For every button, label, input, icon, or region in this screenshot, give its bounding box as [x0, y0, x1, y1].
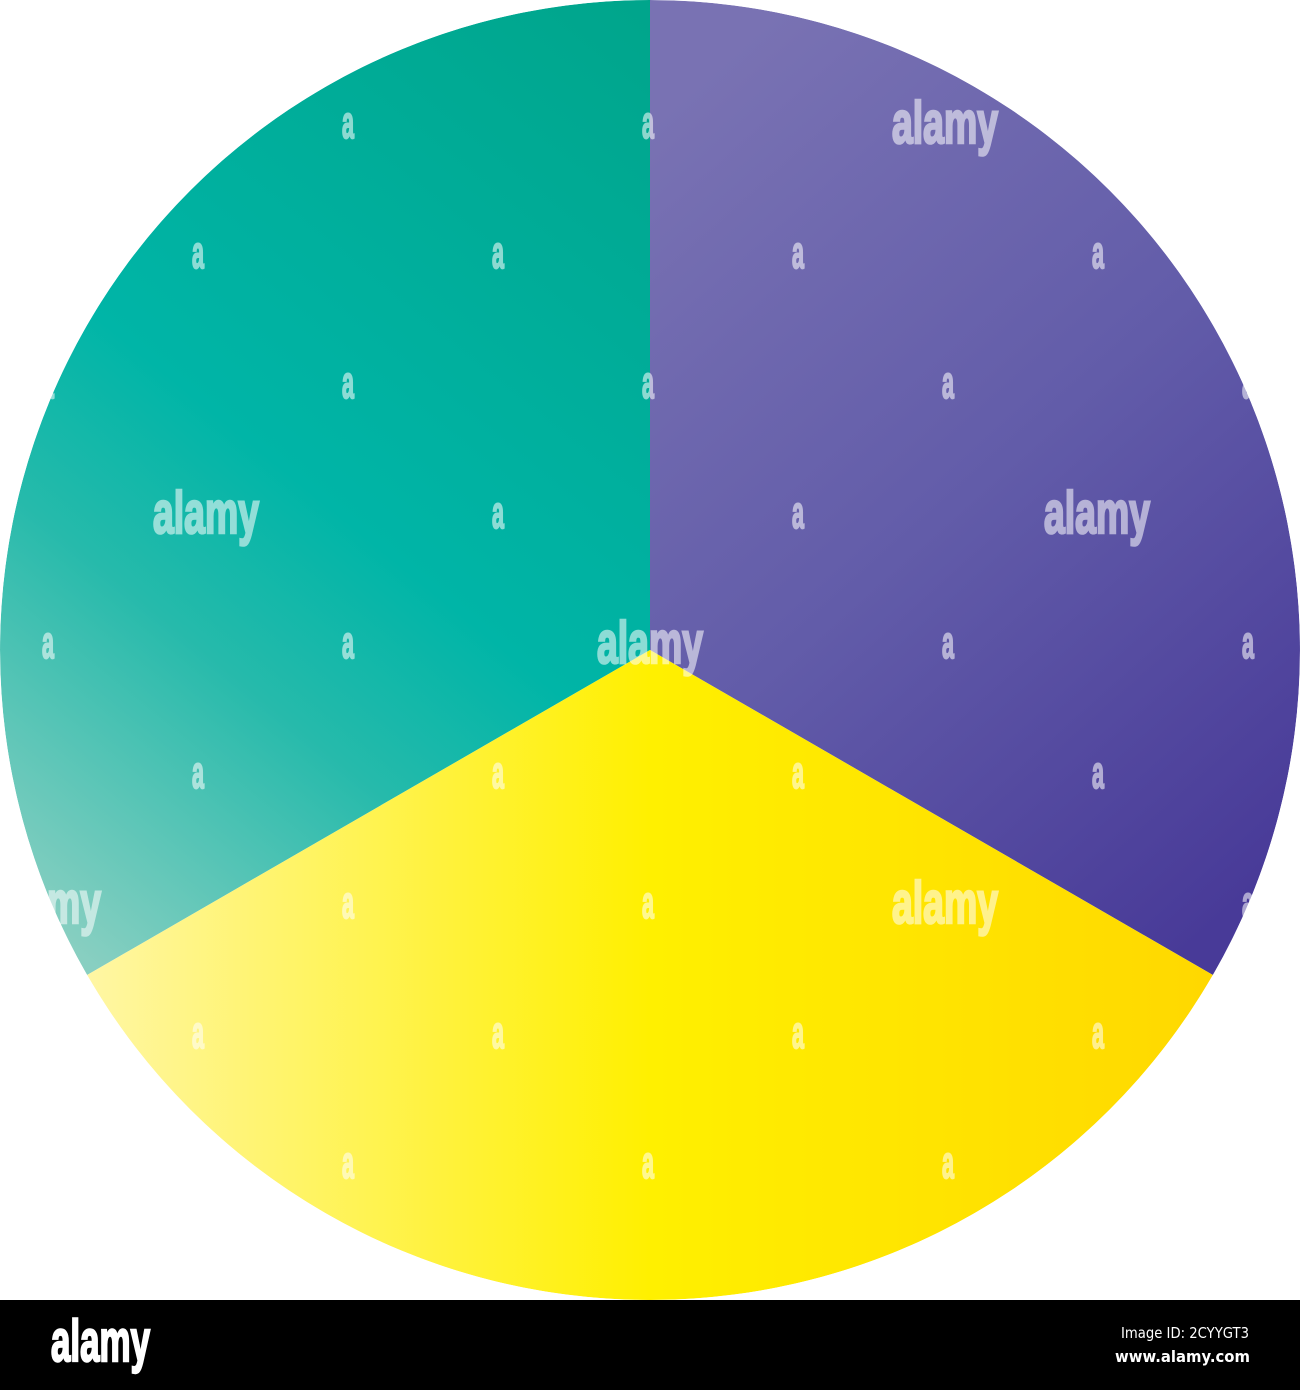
watermark small letters: a [642, 97, 654, 148]
watermark small letters: a [792, 227, 804, 278]
image id: Image ID: 2CYYGT3 [1121, 1324, 1249, 1342]
watermark small letters: a [342, 1137, 354, 1188]
infographic canvas: a [1242, 617, 1254, 668]
watermark small letters: a [942, 357, 954, 408]
watermark small letters: a [42, 617, 54, 668]
watermark wordmarks: alamy [892, 90, 998, 156]
watermark wordmarks: alamy [892, 870, 998, 936]
watermark small letters: a [942, 617, 954, 668]
watermark small letters: a [342, 877, 354, 928]
watermark wordmarks: alamy [597, 610, 703, 676]
watermark small letters: a [492, 747, 504, 798]
watermark small letters: a [792, 1007, 804, 1058]
watermark small letters: a [342, 357, 354, 408]
watermark small letters [42, 97, 1254, 1188]
watermark small letters: a [492, 227, 504, 278]
footer bar [0, 1300, 1300, 1390]
infographic canvas: a [1242, 877, 1254, 928]
watermark small letters: a [792, 487, 804, 538]
watermark wordmarks: alamy [153, 480, 259, 546]
watermark small letters: a [1092, 227, 1104, 278]
watermark small letters: a [192, 1007, 204, 1058]
footer logo: alamy [51, 1309, 150, 1374]
watermark small letters: a [492, 1007, 504, 1058]
watermark small letters: a [642, 357, 654, 408]
watermark overlay [0, 90, 1254, 1188]
watermark wordmarks: alamy [0, 870, 101, 936]
watermark wordmarks: alamy [1044, 480, 1150, 546]
watermark small letters: a [642, 877, 654, 928]
watermark small letters: a [492, 487, 504, 538]
watermark small letters: a [192, 747, 204, 798]
watermark small letters: a [942, 1137, 954, 1188]
watermark small letters: a [642, 1137, 654, 1188]
slice: purple [650, 0, 1300, 975]
watermark small letters: a [342, 97, 354, 148]
watermark small letters: a [342, 617, 354, 668]
watermark small letters: a [1092, 1007, 1104, 1058]
watermark wordmarks [0, 90, 1150, 936]
slice: yellow [87, 650, 1213, 1300]
watermark small letters: a [1092, 747, 1104, 798]
watermark small letters: a [42, 357, 54, 408]
slice: teal [0, 0, 650, 975]
infographic canvas: a [1242, 357, 1254, 408]
website url: www.alamy.com [1115, 1347, 1250, 1366]
watermark small letters: a [192, 227, 204, 278]
watermark small letters: a [792, 747, 804, 798]
